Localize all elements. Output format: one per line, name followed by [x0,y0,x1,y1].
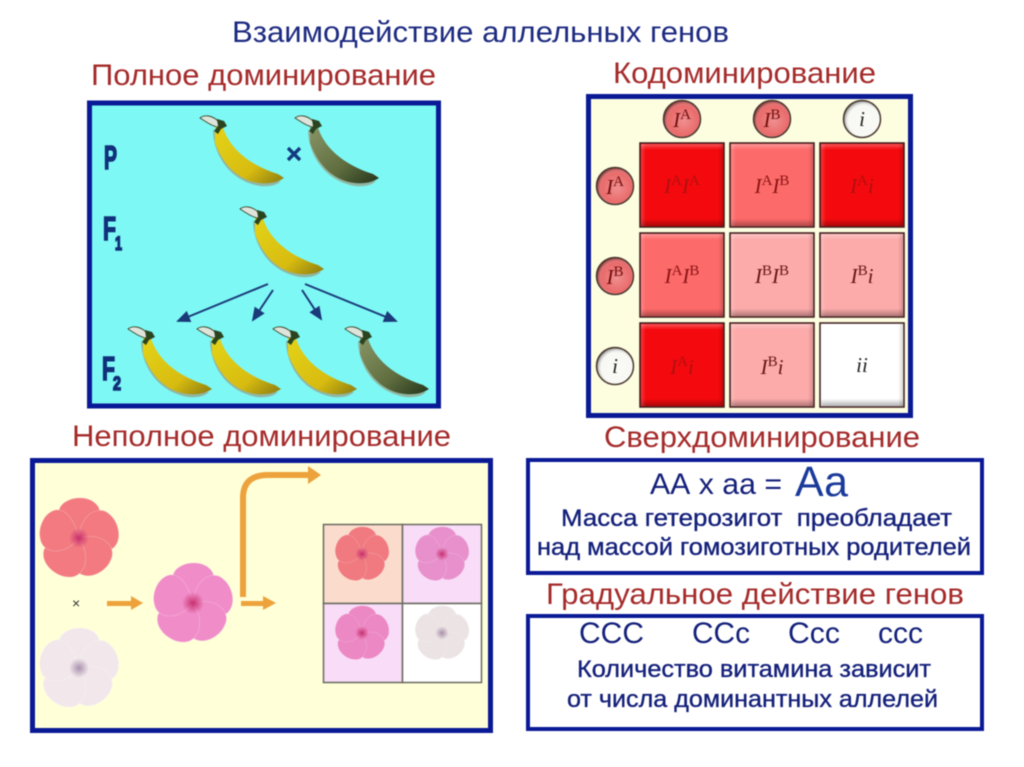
genotype labels: B [779,263,789,279]
genotype labels: i [688,355,694,379]
genotype labels [663,173,874,379]
panel: gradual action [528,616,982,729]
cross sign [288,148,300,160]
generation labels: 2 [113,374,121,395]
heading: overdominance: Сверхдоминирование [604,421,920,454]
cell bevels [641,144,903,406]
genotype labels: A [689,173,700,189]
flower: white parent [34,628,124,715]
generation labels: F [102,350,115,387]
generation labels: F [103,210,116,247]
panel: complete dominance [90,103,438,406]
description [537,505,971,561]
genotype labels: A [671,173,682,189]
generation labels: P [104,139,117,176]
allele labels: A [680,107,691,123]
description: Масса гетерозигот преобладает [561,505,952,532]
description: над массой гомозиготных родителей [537,534,971,561]
F2 pods [128,327,429,397]
genotype labels: I [665,264,672,288]
genotypes: ССС [579,617,644,650]
genotype labels: I [755,174,762,198]
allele labels: i [859,107,865,131]
genotype labels: B [858,263,868,279]
small flowers [332,527,472,665]
allele labels: I [606,265,613,289]
generation labels [102,139,122,395]
allele labels [605,107,865,378]
allele labels: I [763,108,770,132]
genotype labels: i [868,264,874,288]
heading: gradual action: Градуальное действие генов [546,578,964,611]
arrow: hybrid to offspring [243,466,321,597]
genotypes: ССс [692,617,750,650]
allele circles [596,100,880,384]
genotype labels: i [868,174,874,198]
arrow: hybrid forward [241,596,276,610]
cell grid [640,143,904,407]
genotypes: ссс [878,617,923,650]
genotype labels: A [672,263,683,279]
panel: overdominance [528,458,982,573]
allele labels: i [612,354,618,378]
genotype labels: A [677,354,688,370]
genotype labels: I [670,355,677,379]
formula: АА х аа = [650,468,782,501]
genotype labels: B [762,263,772,279]
genotype labels: B [779,173,789,189]
allele labels: A [613,174,624,190]
panel: codominance [588,96,910,416]
genotype labels: ii [856,353,868,377]
cross sign: × [72,595,80,611]
allele labels: B [613,264,624,280]
F1 pod [240,207,324,277]
heading: complete dominance: Полное доминирование [91,59,436,92]
genotype labels: i [778,355,784,379]
flower: pink hybrid [148,563,238,650]
heading: incomplete dominance: Неполное доминирование [72,420,451,453]
punnett square [324,524,482,682]
genotype labels: I [681,264,690,288]
genotype labels: I [771,264,780,288]
description: от числа доминантных аллелей [567,686,938,713]
genotype labels: I [755,264,762,288]
genotype labels: I [851,264,858,288]
heading: codominance: Кодоминирование [613,57,876,90]
arrows [178,284,396,321]
panel: incomplete dominance [32,460,490,730]
genotype labels: I [761,355,768,379]
genotype labels: I [771,174,780,198]
genotype labels: I [664,174,671,198]
generation labels: 1 [115,234,122,255]
genotype labels: B [689,263,699,279]
flower: red parent [34,498,124,585]
description: Количество витамина зависит [577,656,931,683]
parent pods [200,116,379,186]
result genotype: Аа [795,458,848,506]
allele labels: B [770,107,781,123]
genotype labels: I [850,174,857,198]
allele labels: I [606,175,613,199]
title: Взаимодействие аллельных генов [232,16,729,49]
allele labels: I [673,108,680,132]
genotype labels: I [681,174,690,198]
genotypes: Ссс [788,617,840,650]
description [567,656,938,713]
genotype labels: B [768,354,778,370]
allele circle shading [597,101,880,384]
arrow: cross to hybrid [107,596,143,610]
genotypes [579,617,923,650]
genotype labels: A [857,173,868,189]
genotype labels: A [762,173,773,189]
